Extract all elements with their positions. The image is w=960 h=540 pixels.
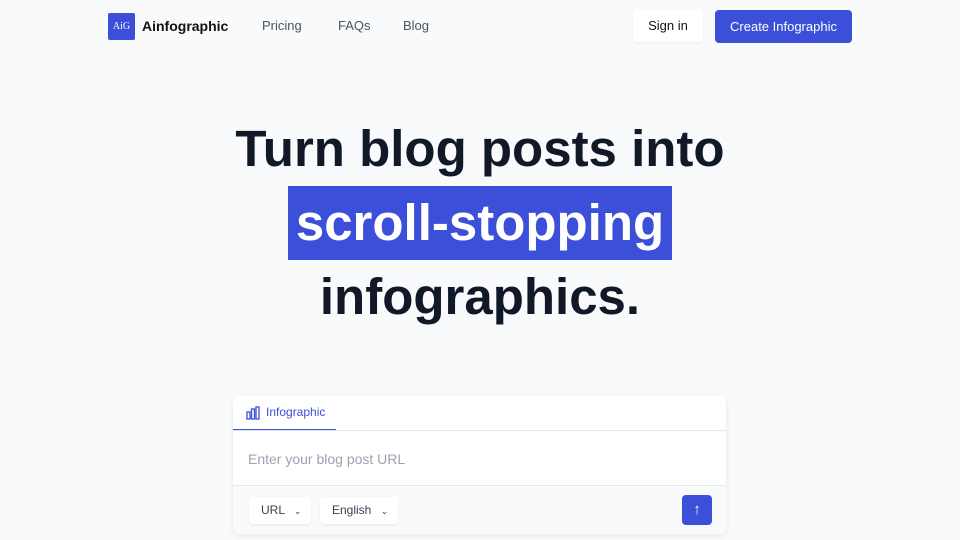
- sign in button: Sign in: [648, 18, 688, 33]
- nav links: [262, 18, 429, 33]
- header nav: [108, 10, 852, 43]
- language dropdown: [320, 497, 398, 524]
- url dropdown: URL ⌄: [261, 503, 301, 517]
- logo icon: AiG: [113, 21, 130, 32]
- highlighted phrase: scroll-stopping: [296, 194, 664, 251]
- nav links: Pricing: [262, 18, 302, 33]
- headline: [235, 120, 725, 325]
- logo text: Ainfographic: [142, 18, 228, 34]
- create infographic button: [715, 10, 852, 43]
- headline: infographics.: [320, 268, 640, 325]
- tab: infographic: Infographic: [266, 405, 325, 419]
- create infographic button: Create Infographic: [730, 19, 837, 34]
- nav links: FAQs: [338, 18, 371, 33]
- bottom toolbar: [233, 485, 726, 534]
- sign in button: [633, 10, 703, 42]
- submit arrow button: [682, 495, 712, 525]
- logo: [108, 13, 228, 40]
- language dropdown: English ⌄: [332, 503, 388, 517]
- icon: bar chart: [246, 406, 260, 420]
- url input placeholder: Enter your blog post URL: [248, 451, 405, 467]
- tab: infographic: [233, 396, 336, 431]
- submit arrow button: ↑: [693, 501, 701, 518]
- input card: [233, 396, 726, 534]
- headline: Turn blog posts into: [235, 120, 725, 177]
- logo icon: [108, 13, 135, 40]
- url dropdown: [249, 497, 311, 524]
- nav links: Blog: [403, 18, 429, 33]
